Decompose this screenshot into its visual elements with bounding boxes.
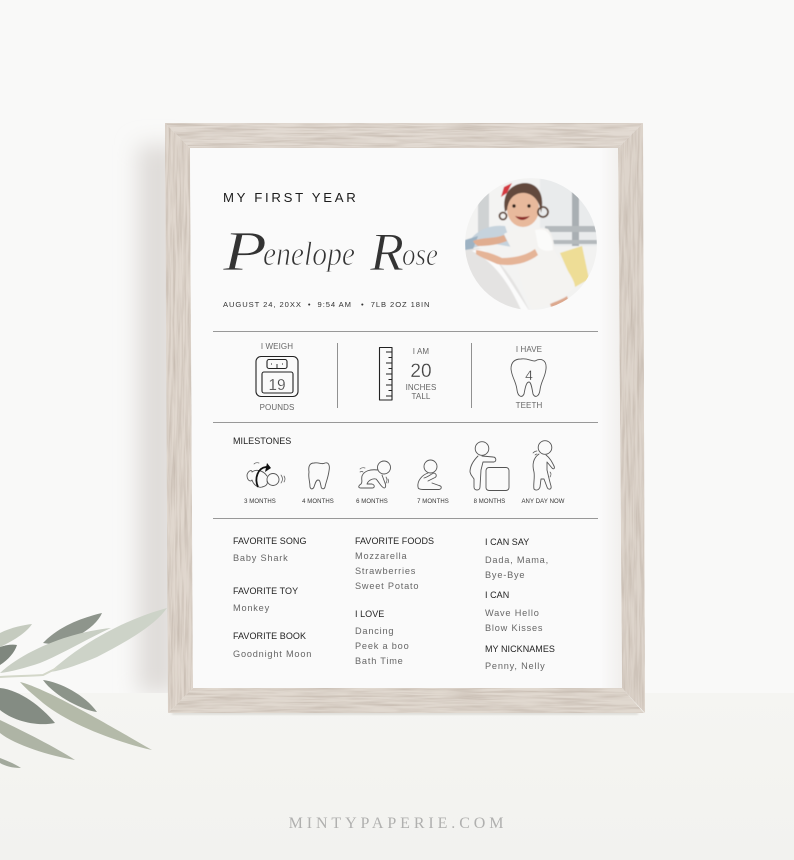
baby name in script	[222, 221, 438, 283]
favorites column 1: Baby Shark	[233, 553, 288, 563]
milestone: 8 months standing at block	[470, 442, 509, 505]
baby name in script: P	[222, 221, 267, 283]
favorites column 2: Sweet Potato	[355, 581, 419, 591]
stat: weight: 19	[268, 377, 286, 394]
milestone: 6 months crawling	[356, 461, 390, 505]
favorites column 1: Monkey	[233, 603, 270, 613]
baby name in script: ose	[402, 236, 438, 272]
favorites column 1: FAVORITE BOOK	[233, 631, 306, 641]
favorites column 1: FAVORITE SONG	[233, 536, 306, 546]
milestone: walking: ANY DAY NOW	[521, 499, 565, 505]
favorites column 3: I CAN SAY	[485, 537, 529, 547]
milestone: 3 months rolling: 3 MONTHS	[244, 499, 276, 505]
favorites column 1: Goodnight Moon	[233, 649, 312, 659]
favorites column 3: MY NICKNAMES	[485, 644, 555, 654]
favorites column 3	[485, 537, 555, 671]
frame contact shadow	[172, 711, 638, 715]
stat: teeth: TEETH	[516, 401, 542, 410]
stat: weight	[256, 342, 298, 412]
favorites column 2: Bath Time	[355, 656, 404, 666]
milestones row	[244, 441, 565, 505]
baby name in script: R	[369, 222, 404, 282]
favorites column 3: I CAN	[485, 590, 509, 600]
baby name in script: enelope	[263, 236, 355, 273]
stat: teeth: 4	[525, 367, 533, 383]
milestone: 8 months standing at block: 8 MONTHS	[474, 499, 505, 505]
divider rules	[213, 332, 598, 518]
photo: smiling baby	[465, 178, 597, 312]
watermark: MINTYPAPERIE.COM	[289, 815, 507, 832]
stat: weight: I WEIGH	[261, 342, 293, 351]
favorites column 3: Penny, Nelly	[485, 661, 546, 671]
favorites column 3: Blow Kisses	[485, 623, 543, 633]
stat: height: TALL	[412, 392, 431, 401]
background: table surface	[0, 693, 794, 860]
milestones heading: MILESTONES	[233, 436, 291, 446]
favorites column 2: Dancing	[355, 626, 394, 636]
stat: teeth	[511, 345, 546, 410]
title: MY FIRST YEAR	[223, 190, 358, 205]
frame shadow on wall	[138, 145, 178, 693]
milestone: 7 months sitting: 7 MONTHS	[417, 499, 449, 505]
favorites column 2	[355, 536, 434, 666]
milestone: 4 months tooth	[302, 463, 334, 505]
birth details: AUGUST 24, 20XX • 9:54 AM • 7LB 2OZ 18IN	[223, 300, 430, 309]
milestone: 6 months crawling: 6 MONTHS	[356, 499, 388, 505]
stat: height: INCHES	[406, 383, 436, 392]
milestone: 3 months rolling	[244, 463, 285, 505]
milestone: 7 months sitting	[417, 460, 449, 505]
icon: scale	[256, 356, 298, 396]
favorites column 3: Wave Hello	[485, 608, 540, 618]
poster paper	[190, 148, 622, 688]
favorites column 2: FAVORITE FOODS	[355, 536, 434, 546]
milestone: walking	[521, 441, 565, 505]
milestone: 4 months tooth: 4 MONTHS	[302, 499, 334, 505]
icon: ruler	[380, 348, 392, 400]
stat: teeth: I HAVE	[516, 345, 542, 354]
olive branch decoration	[0, 608, 167, 768]
stat: weight: POUNDS	[260, 403, 294, 412]
favorites column 1	[233, 536, 312, 659]
favorites column 2: Mozzarella	[355, 551, 408, 561]
stat: height	[380, 347, 436, 401]
favorites column 2: I LOVE	[355, 609, 384, 619]
favorites column 3: Dada, Mama,	[485, 555, 549, 565]
icon: tooth	[511, 359, 546, 396]
favorites column 3: Bye-Bye	[485, 570, 525, 580]
favorites column 2: Strawberries	[355, 566, 416, 576]
stat: height: 20	[410, 361, 432, 382]
favorites column 2: Peek a boo	[355, 641, 410, 651]
stat: height: I AM	[413, 347, 429, 356]
wooden picture frame	[165, 123, 645, 713]
favorites column 1: FAVORITE TOY	[233, 586, 298, 596]
